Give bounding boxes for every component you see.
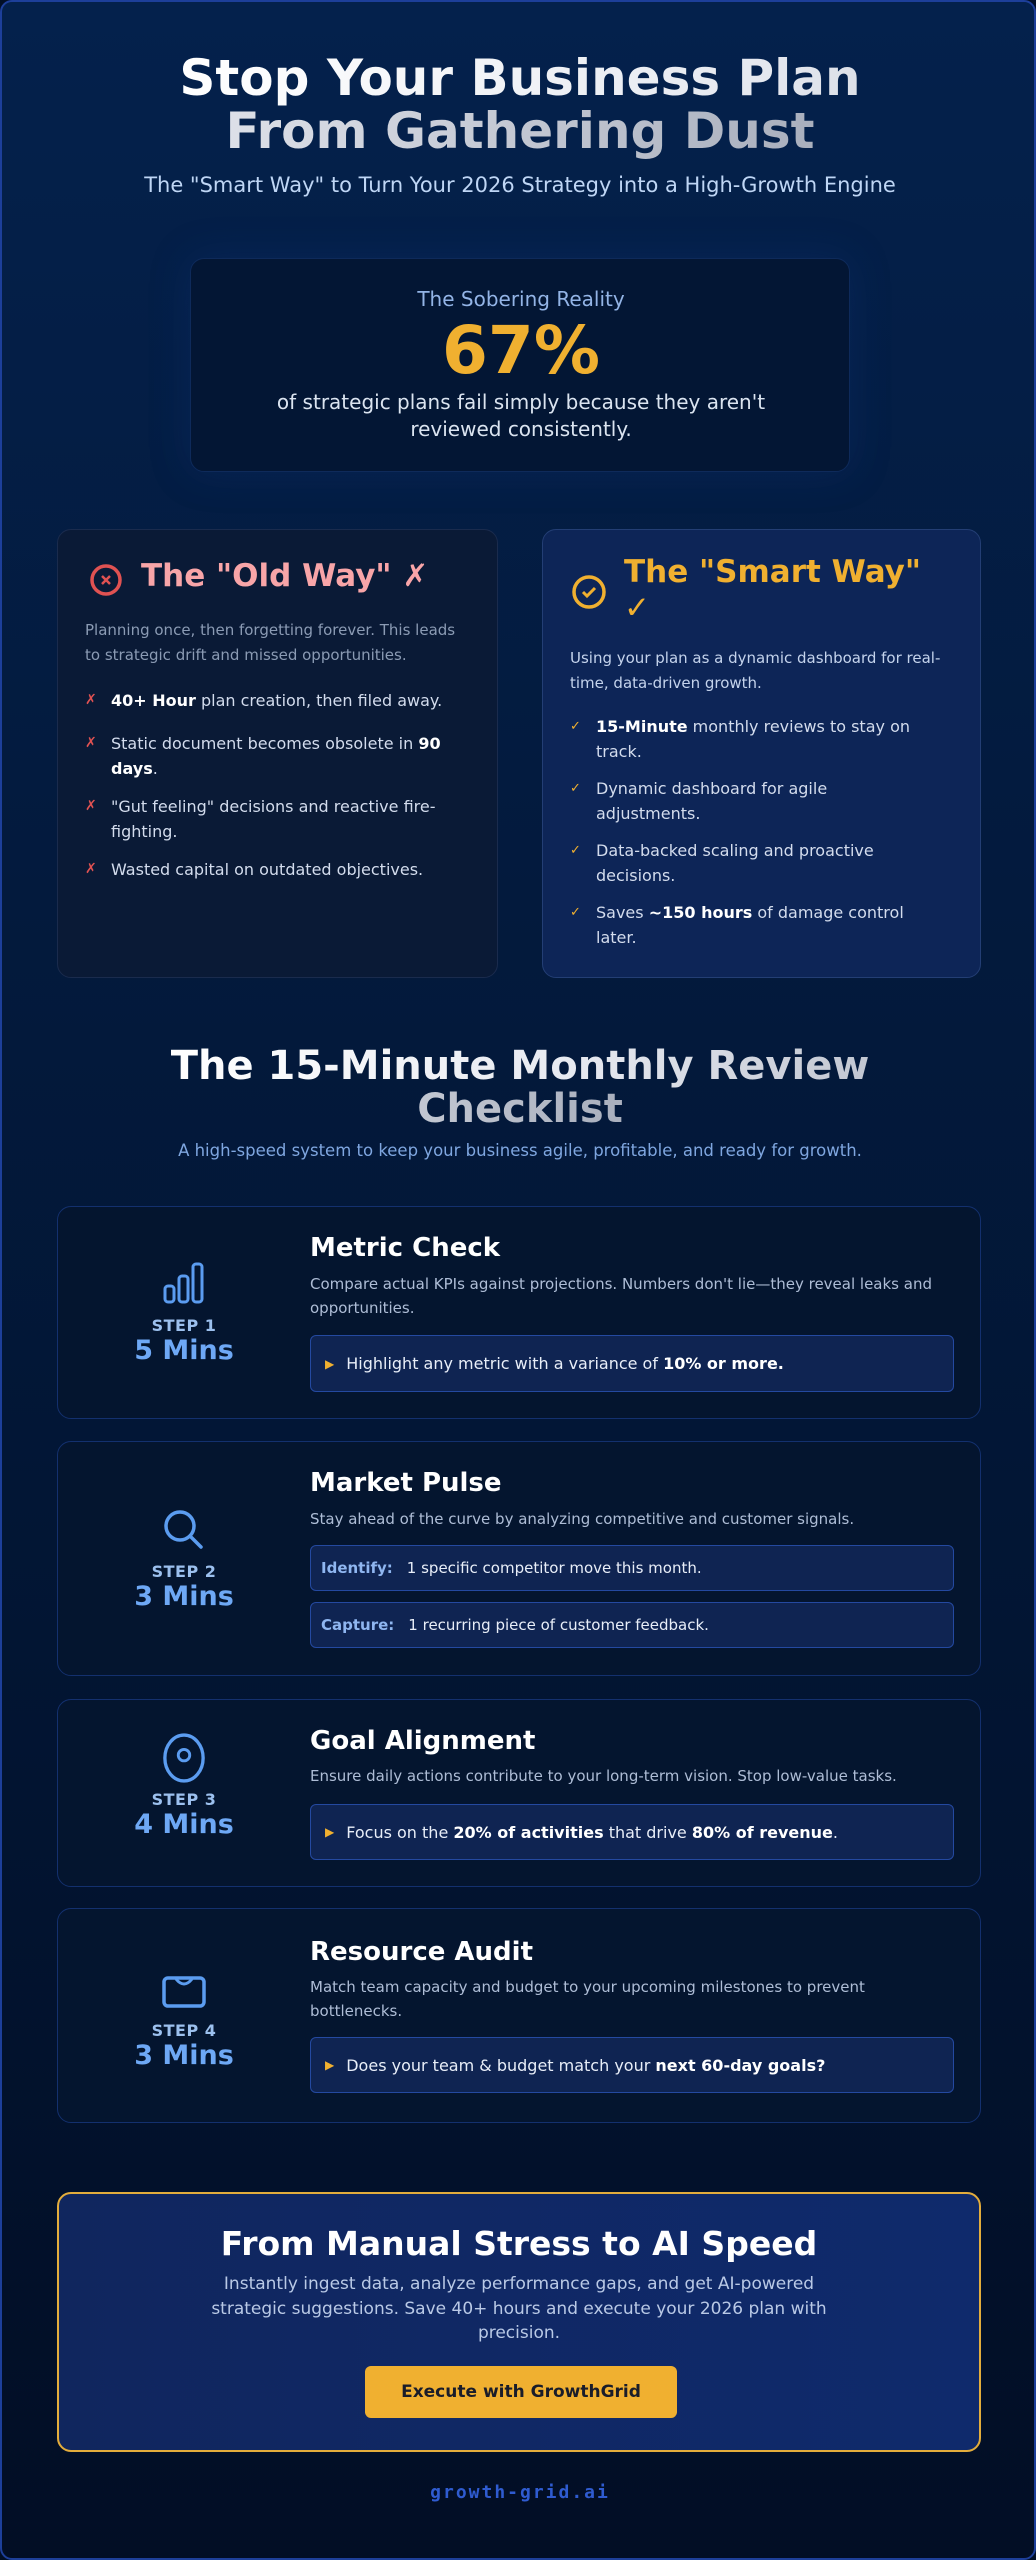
icon: magnifier <box>134 1510 234 1612</box>
highlight box: Highlight any metric with a variance of <box>346 1354 658 1373</box>
step title: Resource Audit <box>310 1937 533 1967</box>
list: smart way benefits: ✓ <box>570 781 581 796</box>
highlight box: 80% of revenue <box>692 1822 833 1842</box>
panel: old way <box>57 529 498 978</box>
step 2: market pulse <box>57 1441 981 1676</box>
icon: bar chart: 5 Mins <box>134 1335 234 1366</box>
list: smart way benefits: later. <box>596 928 637 947</box>
capture box <box>310 1602 954 1648</box>
highlight box: Focus on the that drive . <box>346 1822 838 1842</box>
list: old way problems <box>85 691 442 879</box>
panel: sobering reality stat <box>190 258 850 472</box>
icon: target: 4 Mins <box>134 1809 234 1840</box>
step description: Match team capacity and budget to your upcoming milestones to prevent bottlenecks. <box>310 1978 865 2020</box>
cta button <box>365 2366 677 2418</box>
highlight box: ▶ <box>325 1825 334 1839</box>
cta heading: From Manual Stress to AI Speed <box>221 2224 817 2263</box>
list: old way problems: ✗ <box>85 798 97 814</box>
list: old way problems: ✗ <box>85 861 97 877</box>
list: old way problems: ✗ <box>85 692 97 708</box>
highlight box <box>310 2037 954 2093</box>
highlight box: 20% of activities <box>453 1822 604 1842</box>
capture box: 1 recurring piece of customer feedback. <box>408 1616 709 1634</box>
icon: inbox: 3 Mins <box>134 2040 234 2071</box>
step 4: resource audit <box>57 1908 981 2123</box>
highlight box: ▶ <box>325 2058 334 2072</box>
icon: magnifier: 3 Mins <box>134 1581 234 1612</box>
stat number: 67% <box>442 312 600 389</box>
capture box: Capture: <box>321 1616 394 1634</box>
step title: Market Pulse <box>310 1468 502 1498</box>
footer brand: growth-grid.ai <box>430 2482 610 2503</box>
title: From Gathering Dust <box>225 102 814 160</box>
heading: checklist: The 15-Minute Monthly Review <box>171 1043 869 1089</box>
identify box <box>310 1545 954 1591</box>
panel: smart way <box>542 529 981 978</box>
subtitle: The "Smart Way" to Turn Your 2026 Strategy into a High-Growth Engine <box>144 173 896 197</box>
heading: old way: The "Old Way" ✗ <box>141 558 428 594</box>
title: Stop Your Business Plan <box>179 49 861 107</box>
icon: target: STEP 3 <box>152 1790 216 1809</box>
list: old way problems: "Gut feeling" decisions and reactive fire-fighting. <box>111 797 435 841</box>
list: smart way benefits: ✓ <box>570 905 581 920</box>
step description: Ensure daily actions contribute to your long-term vision. Stop low-value tasks. <box>310 1767 897 1785</box>
icon: inbox: STEP 4 <box>152 2021 216 2040</box>
list: smart way benefits: Dynamic dashboard for agile <box>596 779 827 798</box>
title <box>179 49 861 160</box>
list: old way problems: Wasted capital on outdated objectives. <box>111 860 423 879</box>
cta button: Execute with GrowthGrid <box>401 2382 641 2402</box>
heading: smart way: The "Smart Way" ✓ <box>624 554 921 626</box>
step title: Goal Alignment <box>310 1726 535 1756</box>
list: smart way benefits: Saves ~150 hours of damage control <box>596 903 904 922</box>
icon: target <box>134 1733 234 1840</box>
checklist subtitle: A high-speed system to keep your business agile, profitable, and ready for growth. <box>178 1141 862 1160</box>
icon: bar chart: STEP 1 <box>152 1316 216 1335</box>
highlight box <box>310 1335 954 1392</box>
highlight box: ▶ <box>325 1356 334 1370</box>
icon: check circle <box>572 575 606 609</box>
step description: Stay ahead of the curve by analyzing competitive and customer signals. <box>310 1510 854 1528</box>
icon: inbox <box>134 1976 234 2071</box>
list: smart way benefits <box>570 717 910 947</box>
step 1: metric check <box>57 1206 981 1419</box>
list: smart way benefits: 15-Minute monthly reviews to stay on track. <box>596 717 910 761</box>
stat description: of strategic plans fail simply because they aren't reviewed consistently. <box>277 390 765 441</box>
heading: checklist: Checklist <box>417 1086 623 1132</box>
cta description: Instantly ingest data, analyze performance gaps, and get AI-powered strategic suggestions. Save 40+ hours and execute your 2026 plan with precision. <box>211 2274 827 2343</box>
icon: x circle <box>90 564 122 596</box>
list: smart way benefits: ✓ <box>570 843 581 858</box>
highlight box: 10% or more. <box>663 1354 784 1373</box>
step title: Metric Check <box>310 1233 500 1263</box>
step description: Compare actual KPIs against projections. Numbers don't lie—they reveal leaks and opportunities. <box>310 1275 932 1317</box>
identify box: 1 specific competitor move this month. <box>407 1559 702 1577</box>
identify box: Identify: <box>321 1559 393 1577</box>
list: smart way benefits: Data-backed scaling and proactive decisions. <box>596 841 874 885</box>
step 3: goal alignment <box>57 1699 981 1887</box>
icon: bar chart <box>134 1262 234 1366</box>
description: Using your plan as a dynamic dashboard for real-time, data-driven growth. <box>570 649 940 692</box>
list: smart way benefits: adjustments. <box>596 804 700 823</box>
list: smart way benefits: ✓ <box>570 719 581 734</box>
list: old way problems: Static document becomes obsolete in 90 days. <box>111 734 441 778</box>
icon: magnifier: STEP 2 <box>152 1562 216 1581</box>
highlight box: Does your team & budget match your <box>346 2056 650 2074</box>
panel: call to action <box>57 2192 981 2452</box>
description: Planning once, then forgetting forever. This leads to strategic drift and missed opportunities. <box>85 621 455 664</box>
highlight box <box>310 1804 954 1860</box>
list: old way problems: 40+ Hour plan creation, then filed away. <box>111 691 442 710</box>
stat label: The Sobering Reality <box>417 287 625 311</box>
list: old way problems: ✗ <box>85 735 97 751</box>
heading: checklist <box>171 1043 869 1132</box>
highlight box: next 60-day goals? <box>655 2056 825 2074</box>
